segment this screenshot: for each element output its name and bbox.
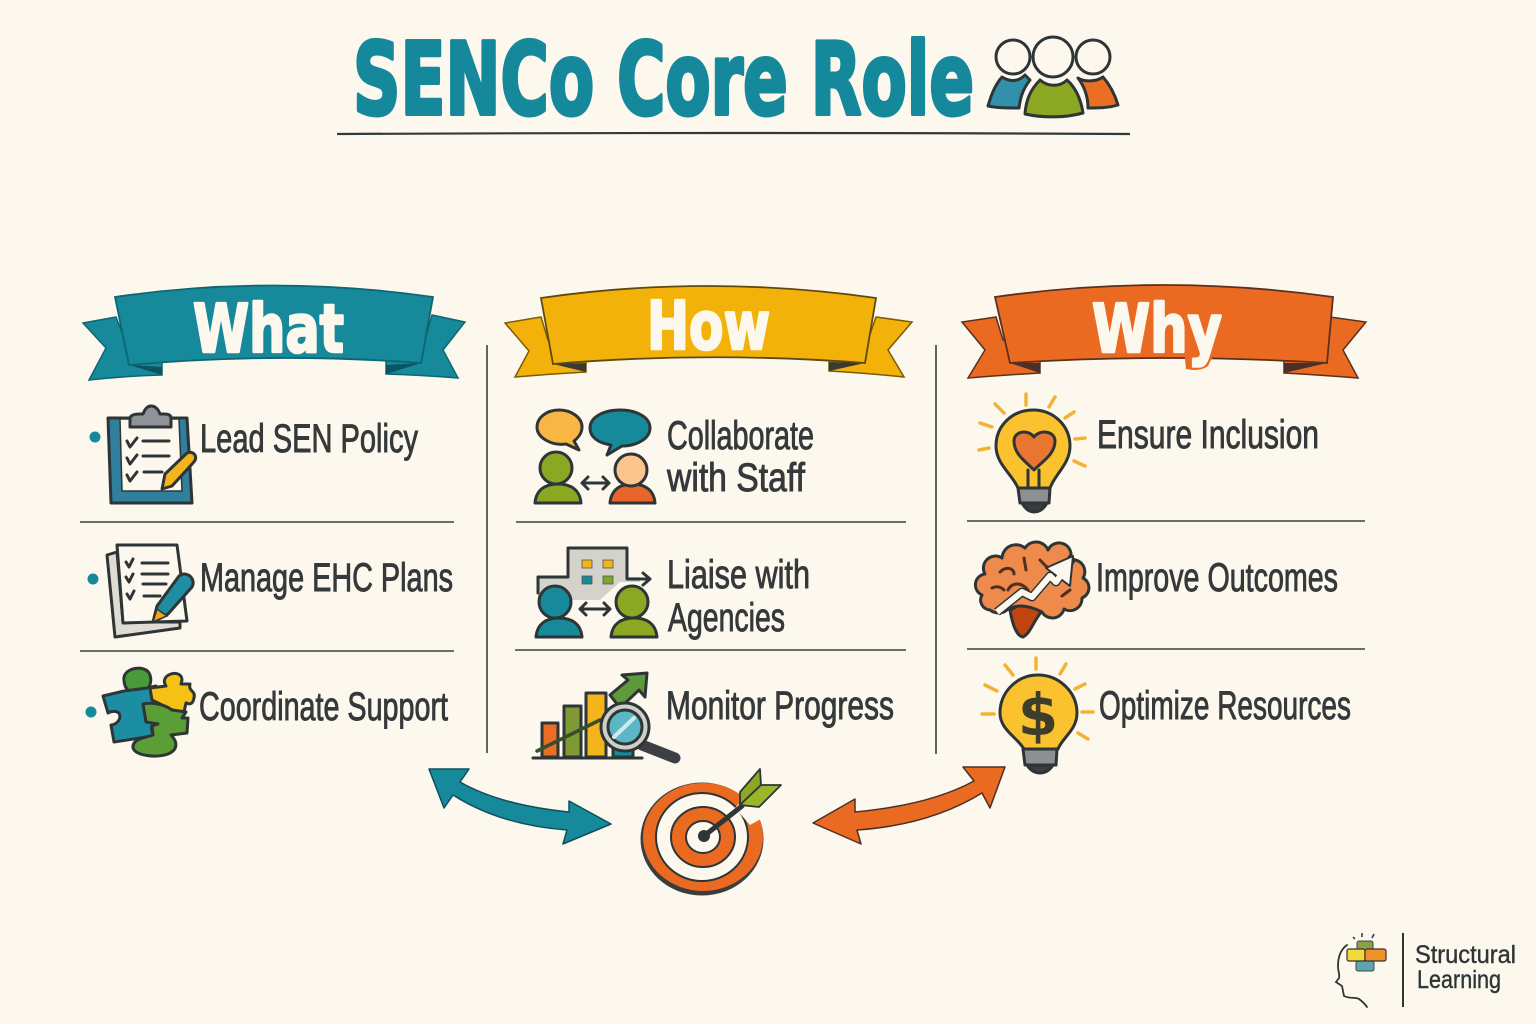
logo: structural learning: [1336, 933, 1516, 1007]
logo head outline: [1336, 945, 1367, 1007]
text: improve outcomes: Improve Outcomes: [1096, 556, 1338, 600]
divider: [967, 648, 1365, 650]
icon: lightbulb with dollar: $: [1018, 681, 1058, 749]
panel: what: [80, 286, 465, 756]
logo wordmark: [1415, 941, 1516, 994]
divider: [80, 650, 454, 652]
banner: how: [505, 286, 912, 377]
icon: brain with arrow: [975, 542, 1089, 637]
divider: [967, 520, 1365, 522]
text: liaise with agencies: [667, 553, 810, 640]
logo wordmark: Structural: [1415, 941, 1516, 969]
text: ensure inclusion: Ensure Inclusion: [1097, 413, 1319, 457]
icon: lightbulb with dollar: [982, 658, 1093, 773]
title underline: [337, 133, 1130, 134]
banner: why: [962, 285, 1366, 378]
icon: clipboard: [108, 406, 196, 503]
text: lead sen policy: Lead SEN Policy: [200, 417, 418, 461]
text: collaborate with staff: Collaborate: [667, 414, 814, 458]
icon: target with dart: [640, 769, 781, 896]
text: coordinate support: Coordinate Support: [199, 685, 448, 729]
y descender outline: [1184, 350, 1216, 370]
panel: how: [505, 286, 912, 758]
text: liaise with agencies: Liaise with: [667, 553, 810, 597]
text: liaise with agencies: Agencies: [668, 596, 785, 640]
arrow: why to target: [813, 767, 1005, 844]
column dividers: [487, 345, 936, 754]
arrow: what and how to target: [429, 769, 611, 844]
bullet: policy: [90, 432, 100, 442]
panel: why: [962, 285, 1366, 773]
title: SENCo Core Role: [353, 21, 974, 138]
icon: lightbulb with heart: [979, 394, 1085, 512]
text: optimize resources: Optimize Resources: [1099, 684, 1351, 728]
text: collaborate with staff: with Staff: [666, 456, 806, 500]
icon: collaborate with staff: [535, 410, 655, 503]
icon: plans document: [107, 545, 193, 637]
divider: [515, 649, 906, 651]
text: manage ehc plans: Manage EHC Plans: [200, 556, 453, 600]
divider: [80, 521, 454, 523]
divider: [516, 521, 906, 523]
icon: group of people: [988, 37, 1118, 117]
bullet: support: [86, 706, 96, 718]
icon: monitor progress: [533, 673, 675, 758]
banner: what: [83, 286, 465, 380]
text: collaborate with staff: [666, 414, 814, 500]
bullet: ehc: [88, 574, 98, 584]
heading: why: Why: [1092, 290, 1222, 368]
icon: puzzle pieces: [103, 668, 194, 756]
text: monitor progress: Monitor Progress: [666, 684, 894, 728]
heading: how: How: [647, 287, 770, 365]
heading: what: What: [193, 290, 344, 368]
logo wordmark: Learning: [1417, 966, 1501, 994]
icon: liaise with agencies: [536, 548, 657, 637]
logo blocks: [1347, 933, 1386, 971]
logo separator: [1402, 933, 1404, 1007]
